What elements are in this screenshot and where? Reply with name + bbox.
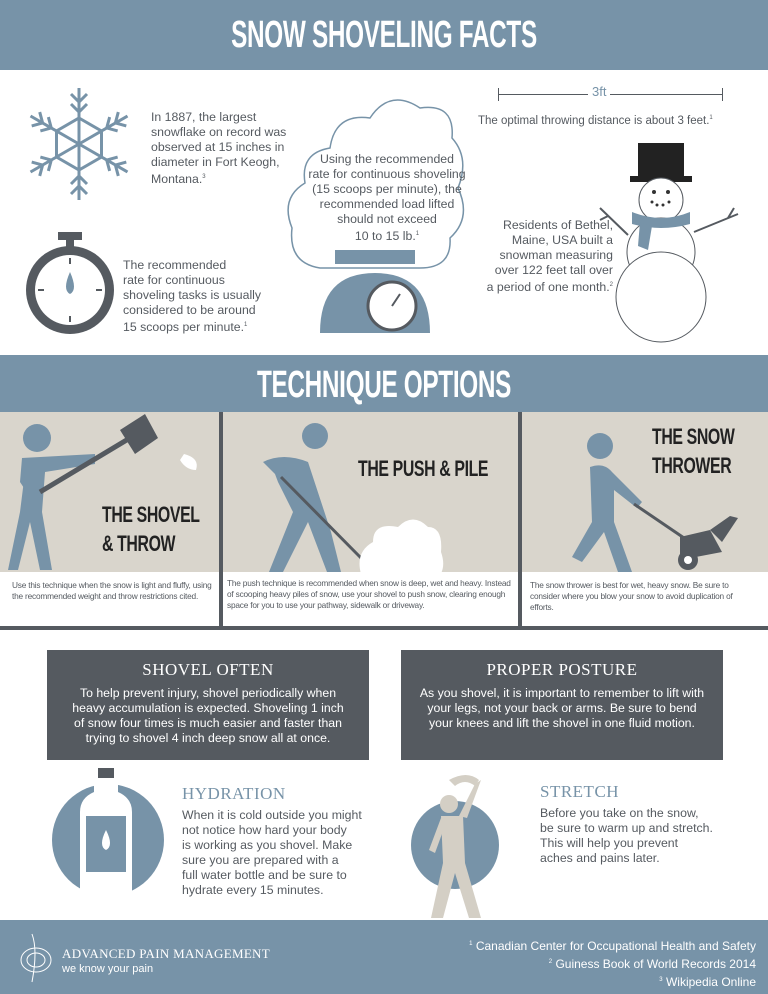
panel: snow thrower bbox=[530, 424, 738, 612]
icon: stopwatch bbox=[26, 232, 114, 334]
box: proper posture: your knees and lift the shovel in one fluid motion. bbox=[429, 716, 695, 730]
icon: snowflake bbox=[30, 88, 128, 200]
logo bbox=[20, 934, 270, 982]
text: load fact bbox=[308, 152, 466, 243]
text: stretch bbox=[540, 782, 713, 865]
text: hydration: HYDRATION bbox=[182, 784, 286, 803]
text: load fact: 10 to 15 lb.1 bbox=[355, 229, 419, 243]
text: snowflake fact: diameter in Fort Keogh, bbox=[151, 155, 280, 169]
box: shovel often: heavy accumulation is expected. Shoveling 1 inch bbox=[72, 701, 344, 715]
text: hydration: When it is cold outside you might bbox=[182, 808, 362, 822]
text: hydration: is working as you shovel. Make bbox=[182, 838, 352, 852]
box: shovel often bbox=[47, 650, 369, 760]
logo: we know your pain bbox=[62, 963, 153, 975]
panels: techniques bbox=[0, 412, 768, 630]
icon: water bottle bbox=[52, 768, 164, 890]
text: stretch: This will help you prevent bbox=[540, 836, 678, 850]
panel: push & pile: The push technique is recommended when snow is deep, wet and heavy. Instead of scooping heavy piles of snow, use your shovel to push snow, clearing enough space for you to use your pathway, sidewalk or driveway. bbox=[227, 578, 511, 610]
text: snowman fact: Maine, USA built a bbox=[512, 233, 613, 247]
panel: shovel & throw: Use this technique when the snow is light and fluffy, using the recommended weight and throw restrictions cited. bbox=[12, 580, 212, 601]
heading: technique options bbox=[0, 355, 768, 412]
box: proper posture bbox=[401, 650, 723, 760]
text: snowflake fact: Montana.3 bbox=[151, 172, 206, 186]
panel: snow thrower: THROWER bbox=[652, 453, 731, 478]
text: hydration: full water bottle and be sure to bbox=[182, 868, 347, 882]
text: snowflake fact: snowflake on record was bbox=[151, 125, 286, 139]
text: rate fact: shoveling tasks is usually bbox=[123, 288, 261, 302]
box: shovel often: SHOVEL OFTEN bbox=[142, 660, 274, 679]
text: stretch: Before you take on the snow, bbox=[540, 806, 699, 820]
text: load fact: recommended load lifted bbox=[320, 197, 454, 211]
sources: 2 Guiness Book of World Records 2014 bbox=[549, 957, 756, 971]
text: snowman fact: Residents of Bethel, bbox=[503, 218, 613, 232]
text: stretch: be sure to warm up and stretch. bbox=[540, 821, 713, 835]
text: stretch: STRETCH bbox=[540, 782, 619, 801]
footer bbox=[0, 920, 768, 994]
panel: push & pile bbox=[227, 423, 511, 610]
panel: shovel & throw: THE SHOVEL bbox=[102, 502, 200, 527]
icon: snowman bbox=[599, 143, 738, 342]
text: hydration: not notice how hard your body bbox=[182, 823, 347, 837]
text: snowman fact: snowman measuring bbox=[500, 248, 613, 262]
text: rate fact: considered to be around bbox=[123, 303, 256, 317]
logo: ADVANCED PAIN MANAGEMENT bbox=[62, 946, 270, 961]
text: snowflake fact: observed at 15 inches in bbox=[151, 140, 284, 154]
text: stretch: aches and pains later. bbox=[540, 851, 660, 865]
panel: snow thrower: THE SNOW bbox=[652, 424, 734, 449]
text: rate fact: The recommended bbox=[123, 258, 226, 272]
box: shovel often: of snow four times is much easier and faster than bbox=[74, 716, 342, 730]
arrow: 3ft: 3ft bbox=[592, 84, 606, 99]
sources: 3 Wikipedia Online bbox=[659, 975, 756, 989]
box: proper posture: As you shovel, it is important to remember to lift with bbox=[420, 686, 704, 700]
box: shovel often: trying to shovel 4 inch deep snow all at once. bbox=[86, 731, 330, 745]
text: load fact: rate for continuous shoveling bbox=[308, 167, 466, 181]
text: load fact: (15 scoops per minute), the bbox=[312, 182, 462, 196]
sources bbox=[469, 939, 756, 989]
text: snowman fact: over 122 feet tall over bbox=[495, 263, 613, 277]
text: snowman fact: a period of one month.2 bbox=[487, 280, 613, 294]
text: snowflake fact: In 1887, the largest bbox=[151, 110, 256, 124]
box: shovel often: To help prevent injury, shovel periodically when bbox=[80, 686, 336, 700]
box: proper posture: PROPER POSTURE bbox=[486, 660, 638, 679]
text: rate fact: 15 scoops per minute.1 bbox=[123, 320, 247, 334]
text: snowflake fact bbox=[151, 110, 286, 186]
panel: push & pile: THE PUSH & PILE bbox=[358, 456, 488, 481]
text: snowman fact bbox=[487, 218, 613, 294]
text: load fact: should not exceed bbox=[337, 212, 437, 226]
header: SNOW SHOVELING FACTS bbox=[231, 14, 537, 56]
header bbox=[0, 0, 768, 70]
text: load fact: Using the recommended bbox=[320, 152, 454, 166]
icon: stretch figure bbox=[411, 775, 499, 918]
icon: snow cloud scale bbox=[287, 99, 464, 333]
panel: shovel & throw bbox=[8, 414, 212, 601]
panel: snow thrower: The snow thrower is best for wet, heavy snow. Be sure to consider where you blow your snow to avoid duplication of efforts. bbox=[530, 580, 733, 612]
sources: 1 Canadian Center for Occupational Health and Safety bbox=[469, 939, 756, 953]
text: rate fact: rate for continuous bbox=[123, 273, 225, 287]
box: proper posture: your legs, not your back or arms. Be sure to bend bbox=[427, 701, 697, 715]
text: throwing distance: The optimal throwing distance is about 3 feet.1 bbox=[478, 115, 713, 127]
heading: technique options: TECHNIQUE OPTIONS bbox=[257, 364, 511, 406]
text: hydration bbox=[182, 784, 362, 897]
text: hydration: sure you are prepared with a bbox=[182, 853, 339, 867]
text: hydration: hydrate every 15 minutes. bbox=[182, 883, 324, 897]
panel: shovel & throw: & THROW bbox=[102, 531, 175, 556]
text: rate fact bbox=[123, 258, 261, 334]
